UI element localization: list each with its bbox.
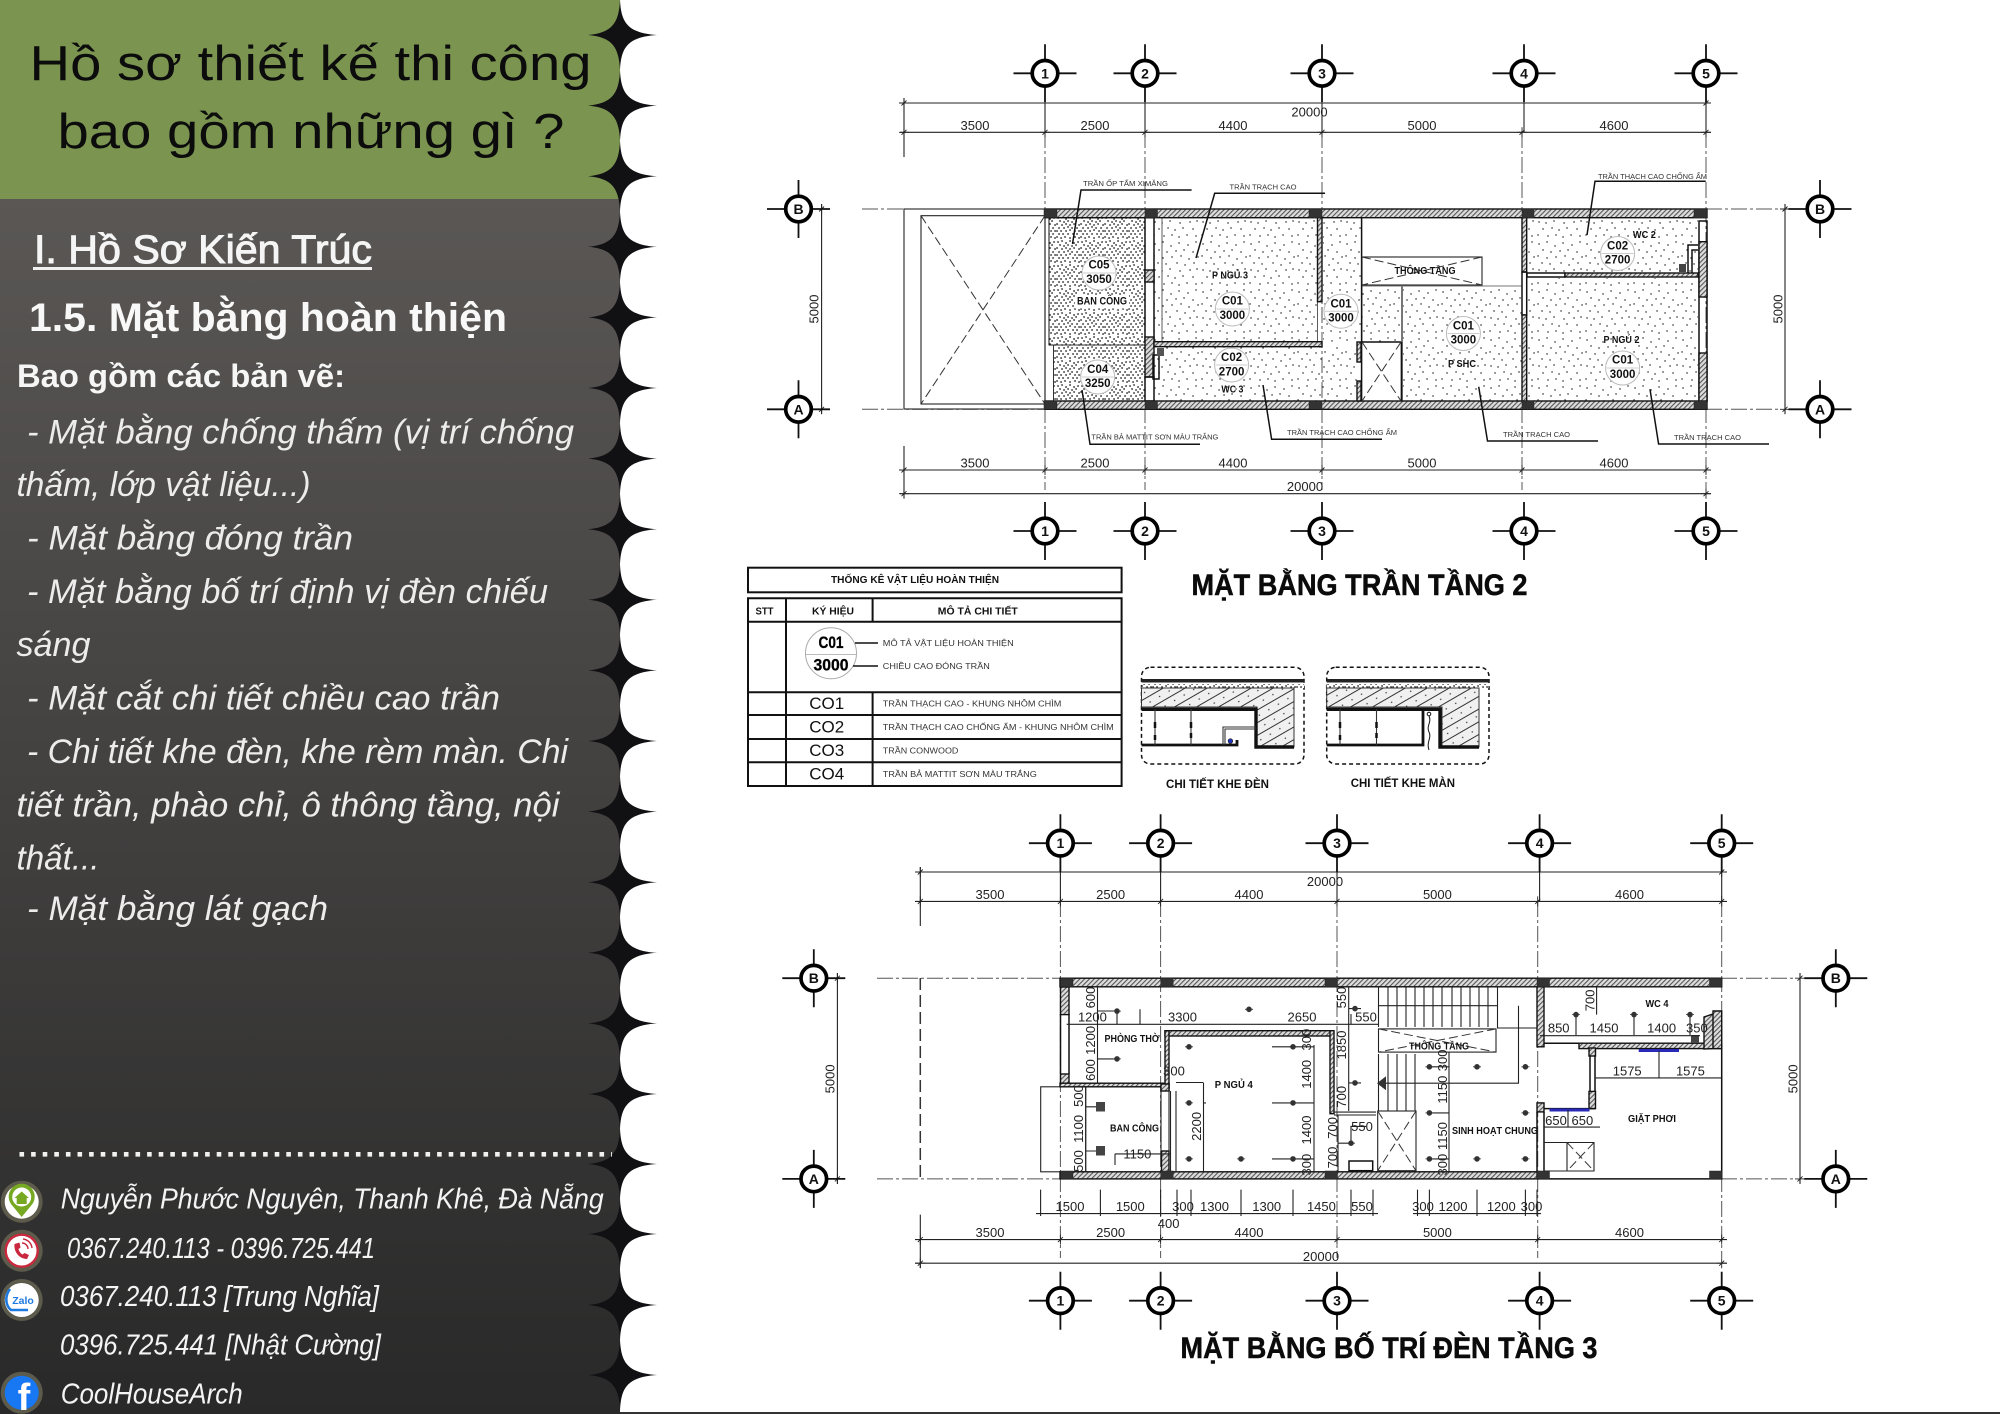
lighting dimensions: 1575	[1676, 1064, 1705, 1078]
table rows: TRẦN THẠCH CAO CHỐNG ẨM - KHUNG NHÔM CHÌM	[883, 721, 1114, 732]
icon: facebook	[1, 1372, 43, 1414]
detail captions	[1166, 777, 1455, 791]
contact text: Nguyễn Phước Nguyên, Thanh Khê, Đà Nẵng	[61, 1182, 604, 1215]
legend symbol: C01	[818, 633, 844, 652]
table rows: TRẦN CONWOOD	[883, 746, 958, 756]
plan: lighting layout floor 3	[782, 814, 1867, 1330]
room names: WC 4	[1646, 999, 1669, 1010]
table title	[748, 568, 1122, 592]
list text: - Mặt bằng lát gạch	[27, 890, 328, 928]
room names: GIẶT PHƠI	[1628, 1112, 1676, 1125]
room names: P SHC	[1448, 359, 1476, 370]
dimensions: 300	[1412, 1199, 1434, 1214]
dimensions: 2500	[1081, 118, 1109, 133]
lighting dimensions: 1100	[1071, 1115, 1086, 1143]
title	[30, 37, 592, 159]
dimensions: 5000	[1770, 295, 1786, 323]
table header: STT	[756, 606, 774, 618]
dimensions: 2500	[1081, 456, 1109, 470]
ceiling tags: 2700	[1219, 366, 1244, 378]
ceiling tags: 3050	[1086, 274, 1112, 286]
dimensions: 2500	[1096, 887, 1125, 902]
ceiling tags: 3000	[1220, 310, 1245, 322]
detail captions: CHI TIẾT KHE ĐÈN	[1166, 778, 1269, 791]
axis bubbles: 1	[1041, 65, 1049, 81]
dimensions: 400	[1158, 1216, 1179, 1231]
axis bubbles: 5	[1702, 65, 1710, 81]
legend symbol: 3000	[814, 656, 848, 674]
dimensions: 1200	[1439, 1199, 1467, 1214]
lighting dimensions: 300	[1299, 1029, 1314, 1050]
table rows: CO2	[809, 718, 844, 736]
dimensions: 1450	[1307, 1199, 1336, 1214]
dimensions: 4400	[1235, 1225, 1263, 1240]
header band	[0, 0, 620, 199]
lighting dimensions: 550	[1334, 987, 1349, 1008]
axis bubbles: 4	[1520, 65, 1528, 81]
legend symbol: CHIỀU CAO ĐÓNG TRẦN	[883, 661, 990, 671]
lighting dimensions: 1200	[1078, 1010, 1107, 1025]
walls	[1045, 209, 1707, 409]
dimensions: 5000	[1423, 887, 1452, 902]
axis bubbles: B	[793, 201, 804, 217]
axis bubbles: 3	[1333, 1293, 1341, 1309]
leaders: TRẦN ỐP TẤM XIMĂNG	[1083, 178, 1168, 188]
dimensions: 300	[1172, 1199, 1194, 1214]
axis bubbles: 2	[1141, 523, 1149, 539]
table rows: CO4	[809, 764, 844, 784]
panel: sidebar	[0, 0, 657, 1414]
lighting dimensions: 1400	[1299, 1116, 1314, 1144]
room names: P NGỦ 2	[1604, 333, 1640, 346]
lighting dimensions: 650	[1545, 1113, 1567, 1128]
contact text: CoolHouseArch	[61, 1378, 243, 1410]
axis lines	[862, 132, 1780, 490]
dimensions: 4600	[1615, 887, 1644, 902]
title: Hồ sơ thiết kế thi công	[30, 37, 592, 91]
detail captions: CHI TIẾT KHE MÀN	[1351, 777, 1455, 790]
room names: PHÒNG THỜ	[1104, 1032, 1160, 1045]
axis bubbles	[767, 44, 1852, 560]
dimensions: 5000	[822, 1064, 838, 1093]
dimensions: 3500	[976, 887, 1004, 902]
table rows: TRẦN BẢ MATTIT SƠN MÀU TRẮNG	[883, 768, 1037, 779]
lighting dimensions: 1400	[1299, 1060, 1314, 1089]
axis bubbles: 3	[1333, 835, 1341, 851]
table: materials	[748, 568, 1122, 786]
list text: thất...	[16, 840, 100, 878]
dimensions: 4600	[1615, 1225, 1644, 1240]
table grid	[748, 598, 1122, 786]
lighting dimensions: 2200	[1189, 1112, 1204, 1141]
legend symbol: MÔ TẢ VẬT LIỆU HOÀN THIỆN	[883, 637, 1014, 648]
shafts: THÔNG TẦNG	[1394, 264, 1456, 277]
dimensions: 3500	[961, 456, 989, 470]
table rows: CO3	[809, 741, 844, 760]
dimensions: 4600	[1600, 456, 1628, 470]
list text	[16, 414, 574, 928]
lighting dimensions: 300	[1299, 1154, 1314, 1175]
dimensions: 5000	[806, 295, 822, 323]
lighting dimensions: 500	[1071, 1150, 1086, 1172]
ceiling tags	[1081, 236, 1640, 394]
axis bubbles: 4	[1536, 835, 1544, 851]
ceiling tags: 3000	[1328, 312, 1354, 324]
axis bubbles: 3	[1318, 523, 1326, 539]
list intro: Bao gồm các bản vẽ:	[17, 358, 345, 394]
dimensions: 4600	[1600, 118, 1628, 133]
lighting dimensions: 700	[1325, 1117, 1340, 1139]
section heading: I. Hồ Sơ Kiến Trúc	[34, 228, 372, 272]
list text: - Mặt bằng đóng trần	[27, 520, 353, 558]
lighting dimensions: 600	[1083, 987, 1098, 1008]
body panel	[0, 199, 620, 1414]
shafts	[1362, 257, 1482, 401]
dimensions: 20000	[1307, 874, 1343, 889]
lighting dimensions: 350	[1686, 1021, 1708, 1036]
room names: THÔNG TẦNG	[1409, 1040, 1469, 1053]
contact text: 0367.240.113 - 0396.725.441	[67, 1233, 375, 1265]
leaders: TRẦN TRẠCH CAO	[1674, 432, 1741, 442]
plan title: floor 3 lighting: MẶT BẰNG BỐ TRÍ ĐÈN TẦNG 3	[1180, 1331, 1598, 1365]
lighting dimensions: 1850	[1334, 1031, 1349, 1059]
lighting dimensions: 600	[1083, 1059, 1098, 1081]
ceiling tags: C02	[1607, 240, 1628, 252]
ceiling tags: 2700	[1605, 255, 1630, 267]
room names: WC 2	[1633, 230, 1656, 241]
dimensions	[822, 867, 1805, 1268]
axis bubbles: 5	[1702, 523, 1710, 539]
dimensions: 1500	[1116, 1199, 1145, 1214]
list text: - Mặt bằng bố trí định vị đèn chiếu	[27, 573, 548, 611]
dimensions: 20000	[1287, 479, 1323, 494]
table rows: CO1	[809, 694, 844, 713]
columns	[1044, 209, 1707, 409]
lighting dimensions: 1150	[1435, 1076, 1450, 1104]
detail: curtain slot	[1327, 667, 1489, 764]
stairs	[1349, 987, 1537, 1171]
list text: - Chi tiết khe đèn, khe rèm màn. Chi	[27, 733, 569, 771]
icon: phone	[1, 1230, 43, 1272]
table rows: TRẦN THẠCH CAO - KHUNG NHÔM CHÌM	[883, 699, 1061, 709]
room names: SINH HOẠT CHUNG	[1452, 1126, 1538, 1137]
dimensions: 5000	[1786, 1064, 1800, 1093]
list text: thấm, lớp vật liệu...)	[16, 466, 310, 504]
axis bubbles: 3	[1318, 65, 1326, 81]
lighting dimensions: 650	[1572, 1113, 1593, 1128]
dimensions: 550	[1351, 1199, 1373, 1214]
dimensions: 4400	[1235, 887, 1263, 902]
dimensions: 300	[1521, 1199, 1542, 1214]
dimensions: 5000	[1408, 118, 1436, 133]
lighting dimensions: 850	[1548, 1021, 1570, 1036]
lighting dimensions	[1067, 987, 1721, 1175]
dimensions: 3500	[976, 1225, 1004, 1240]
dimensions: 5000	[1423, 1225, 1452, 1240]
title: bao gồm những gì ?	[58, 105, 564, 159]
room names	[1075, 230, 1656, 396]
dimensions: 1200	[1487, 1199, 1516, 1214]
dimensions: 1300	[1252, 1199, 1281, 1214]
axis bubbles: 5	[1718, 835, 1726, 851]
lighting dimensions: 1400	[1647, 1021, 1676, 1036]
lighting dimensions: 1150	[1123, 1146, 1151, 1161]
axis bubbles: 2	[1157, 835, 1165, 851]
dimensions: 1300	[1200, 1199, 1229, 1214]
walls	[1060, 978, 1722, 1179]
table header: KÝ HIỆU	[812, 605, 854, 618]
lighting dimensions: 700	[1582, 990, 1598, 1011]
dimensions	[806, 98, 1790, 499]
balcony void	[904, 209, 1045, 409]
lighting dimensions: 3300	[1168, 1010, 1197, 1025]
axis bubbles: 2	[1141, 65, 1149, 81]
lighting dimensions: 300	[1163, 1064, 1185, 1078]
plan: ceiling plan floor 2	[767, 44, 1852, 560]
leaders: TRẦN TRẠCH CAO	[1230, 182, 1297, 192]
list text: - Mặt cắt chi tiết chiều cao trần	[27, 680, 500, 718]
lighting dimensions: 700	[1334, 1086, 1349, 1108]
list text: sáng	[16, 626, 91, 664]
axis bubbles: 2	[1157, 1293, 1165, 1309]
leaders: TRẦN TRẠCH CAO	[1503, 429, 1570, 439]
lighting dimensions: 300	[1435, 1154, 1450, 1175]
axis bubbles: 5	[1718, 1293, 1726, 1309]
axis bubbles: A	[1815, 401, 1825, 417]
table rows	[809, 694, 1114, 784]
axis bubbles: A	[1831, 1171, 1841, 1187]
table title: THỐNG KÊ VẬT LIỆU HOÀN THIỆN	[831, 572, 999, 586]
axis bubbles: 1	[1057, 835, 1065, 851]
lighting dimensions: 550	[1355, 1010, 1377, 1025]
leaders: TRẦN BẢ MATTIT SƠN MÀU TRẮNG	[1091, 432, 1219, 442]
room names: BAN CÔNG	[1110, 1121, 1159, 1134]
ceiling tags: C01	[1222, 296, 1244, 308]
ceiling tags: C01	[1612, 355, 1634, 367]
leaders: TRẦN TRẠCH CAO CHỐNG ẨM	[1287, 427, 1397, 437]
lighting dimensions: 2650	[1288, 1010, 1316, 1025]
dimensions: 20000	[1291, 104, 1328, 120]
icon: zalo	[1, 1279, 43, 1321]
axis bubbles: 4	[1536, 1293, 1544, 1309]
contact text	[60, 1182, 604, 1410]
legend symbol	[806, 628, 1014, 679]
ceiling fills	[1049, 218, 1698, 401]
dimensions: 4400	[1219, 456, 1247, 470]
dimensions: 1500	[1056, 1199, 1084, 1214]
list text: tiết trần, phào chỉ, ô thông tầng, nội	[16, 786, 561, 824]
dimensions: 20000	[1303, 1249, 1339, 1264]
ceiling tags: C01	[1453, 320, 1475, 332]
room names: P NGỦ 4	[1215, 1078, 1253, 1091]
ceiling tags: 3000	[1451, 335, 1476, 347]
scalloped star edge	[588, 0, 657, 1410]
lighting dimensions: 1200	[1083, 1026, 1098, 1055]
lighting dimensions: 500	[1071, 1085, 1086, 1107]
axis lines	[877, 901, 1795, 1258]
dimensions: 2500	[1096, 1225, 1125, 1240]
ceiling tags: C05	[1088, 260, 1110, 272]
plan title: floor 2 ceiling: MẶT BẰNG TRẦN TẦNG 2	[1192, 568, 1528, 602]
dimensions: 4400	[1219, 118, 1247, 133]
ceiling tags: C04	[1087, 364, 1109, 376]
table header: MÔ TẢ CHI TIẾT	[938, 605, 1018, 618]
dimensions: 5000	[1408, 456, 1436, 470]
leaders: TRẦN THẠCH CAO CHỐNG ẨM	[1598, 171, 1707, 181]
light points	[1096, 1006, 1694, 1161]
room names	[1104, 999, 1676, 1137]
contact text: 0396.725.441 [Nhật Cường]	[60, 1329, 382, 1361]
lighting dimensions: 300	[1435, 1050, 1450, 1071]
axis bubbles: A	[793, 401, 804, 417]
axis bubbles: 1	[1041, 523, 1049, 539]
dotted divider	[20, 1152, 612, 1157]
icon: zalo: Zalo	[12, 1295, 34, 1307]
ceiling tags: C02	[1221, 352, 1242, 364]
axis bubbles: B	[809, 970, 819, 986]
dimensions: 3500	[961, 118, 989, 133]
table header	[756, 605, 1018, 618]
room names: P NGỦ 3	[1212, 268, 1248, 282]
detail: light slot	[1142, 667, 1304, 764]
contact text: 0367.240.113 [Trung Nghĩa]	[60, 1281, 380, 1313]
leaders	[1072, 171, 1769, 444]
room names: WC 3	[1221, 384, 1244, 396]
room names: BAN CÔNG	[1077, 295, 1127, 308]
axis bubbles: 1	[1057, 1293, 1065, 1309]
list text: - Mặt bằng chống thấm (vị trí chống	[27, 414, 574, 452]
axis bubbles: 4	[1520, 523, 1528, 539]
axis bubbles: B	[1815, 201, 1825, 217]
lighting dimensions: 1575	[1613, 1064, 1642, 1078]
lighting dimensions: 550	[1351, 1119, 1373, 1134]
lighting dimensions: 700	[1325, 1147, 1340, 1168]
icon: location	[1, 1181, 43, 1223]
axis bubbles: B	[1831, 970, 1841, 986]
lighting dimensions: 1150	[1435, 1122, 1450, 1150]
axis bubbles: A	[809, 1171, 819, 1187]
columns	[1060, 978, 1722, 1179]
ceiling tags: 3250	[1085, 378, 1110, 390]
ceiling tags: 3000	[1610, 369, 1635, 381]
ceiling tags: C01	[1330, 298, 1352, 310]
lighting dimensions: 1450	[1590, 1021, 1618, 1036]
balcony outline	[1041, 1087, 1086, 1172]
axis bubbles	[782, 814, 1867, 1330]
subheading: 1.5. Mặt bằng hoàn thiện	[29, 294, 507, 340]
bottom rule	[620, 1412, 2000, 1414]
